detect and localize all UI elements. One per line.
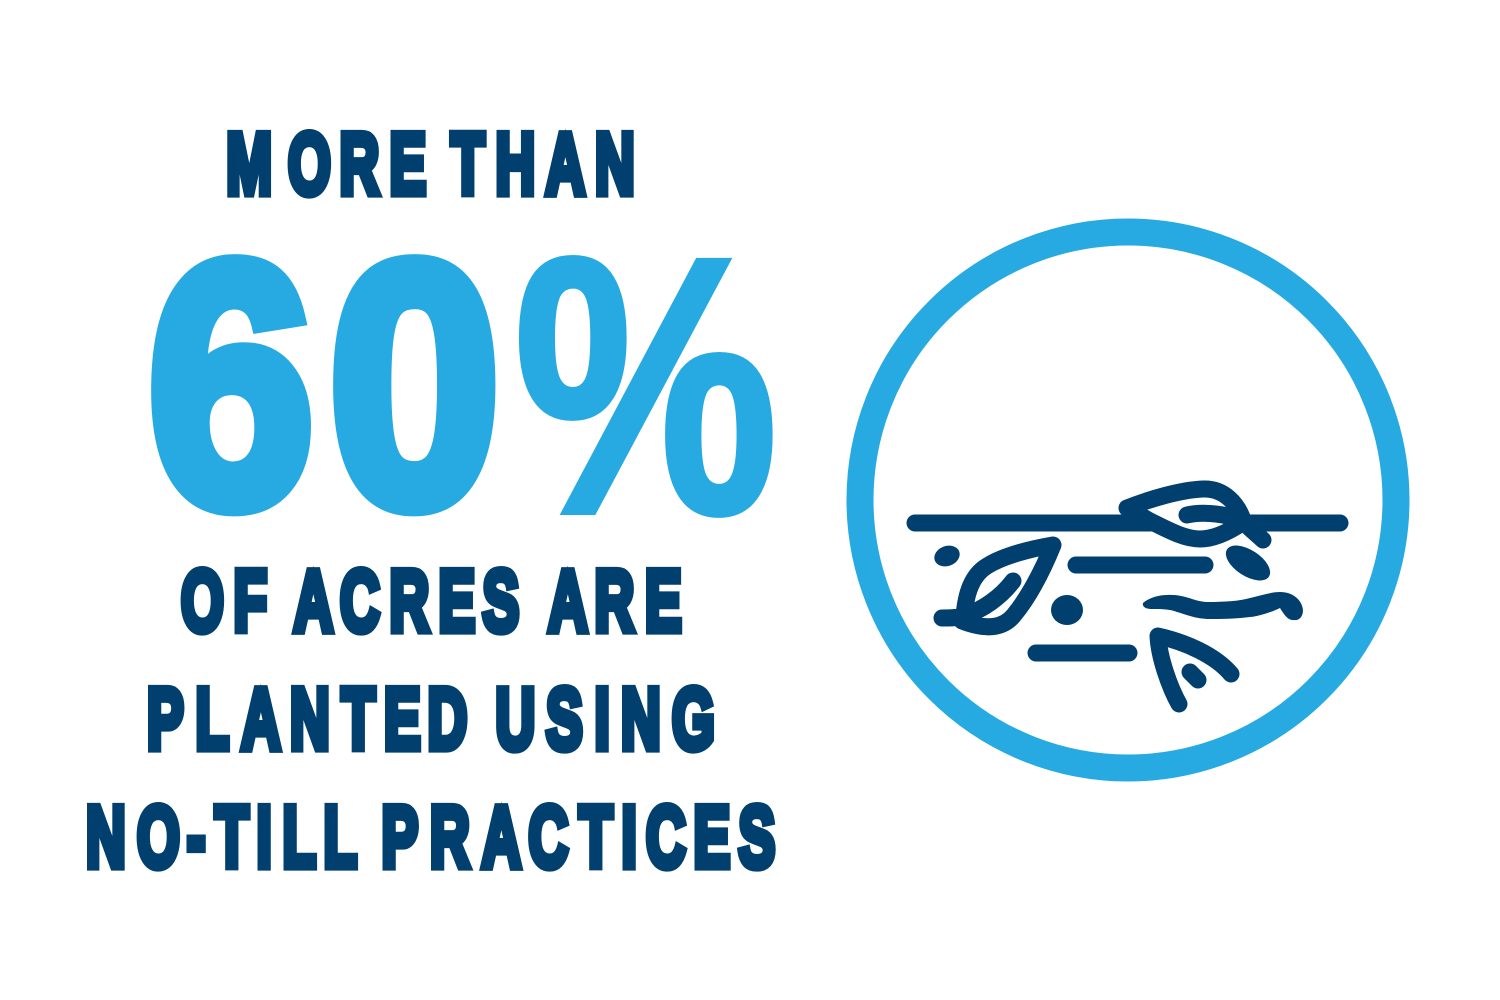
big statistic: 60%	[148, 183, 778, 590]
soil particles	[931, 538, 1276, 680]
heading: more than: MORE THAN	[226, 117, 635, 213]
icon ring	[860, 232, 1396, 768]
big statistic: 60%: 6	[148, 193, 314, 578]
soil lines	[1036, 565, 1205, 653]
ground line	[915, 514, 1340, 532]
big statistic: 60%: 0	[329, 193, 500, 578]
bottom leaf	[1158, 636, 1231, 704]
text block: of acres are planted using no-till practices	[86, 554, 775, 886]
text block: of acres are planted using no-till practices: NO-TILL PRACTICES	[86, 790, 775, 886]
top leaf	[1127, 489, 1263, 540]
text block: of acres are planted using no-till practices: PLANTED USING	[147, 672, 715, 768]
big statistic: 60%: %	[514, 183, 778, 590]
text block: of acres are planted using no-till practices: OF ACRES ARE	[181, 554, 682, 650]
left leaf	[942, 545, 1053, 627]
root	[1143, 592, 1303, 620]
icon: no-till soil in circle	[860, 232, 1396, 768]
